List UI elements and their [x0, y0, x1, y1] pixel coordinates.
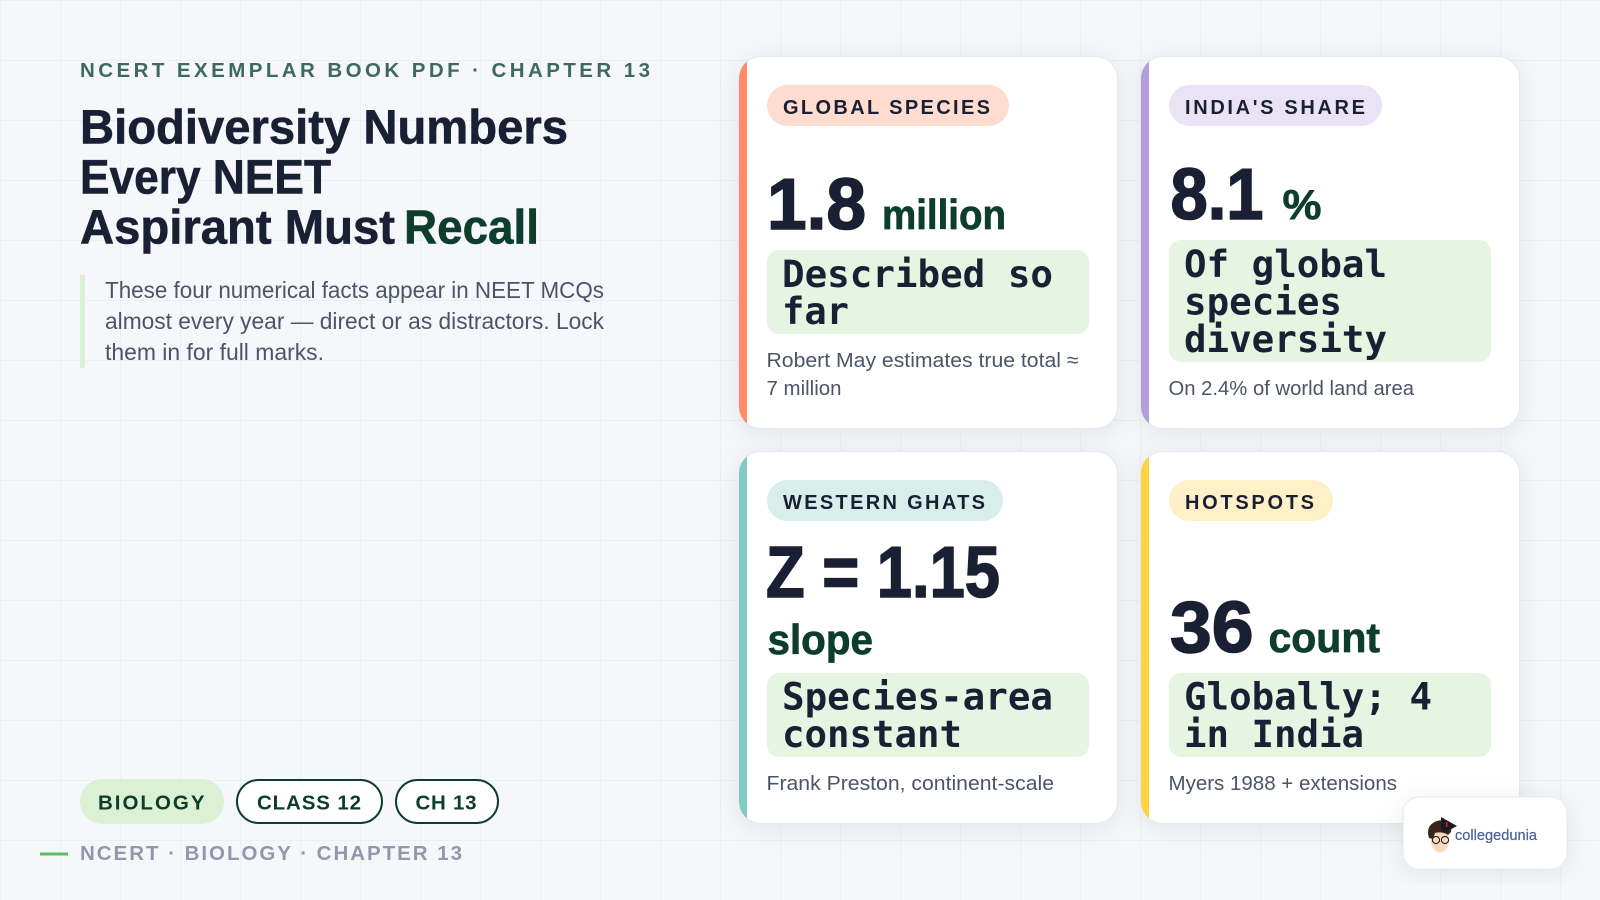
- highlighted description: Of global: [1184, 243, 1387, 286]
- highlighted description: Species-area: [782, 676, 1053, 718]
- pill label: [1169, 85, 1382, 126]
- note: [766, 349, 1078, 400]
- highlighted description: constant: [782, 713, 962, 756]
- pill label: GLOBAL SPECIES: [783, 97, 990, 119]
- tag: chapter 13: [396, 780, 498, 823]
- logo card: collegedunia: [1403, 797, 1567, 869]
- note: Frank Preston, continent-scale: [766, 772, 1054, 795]
- pill label: WESTERN GHATS: [783, 492, 985, 514]
- big number: 36: [1170, 588, 1254, 668]
- pill label: HOTSPOTS: [1185, 492, 1314, 514]
- big number: 8.1: [1170, 155, 1264, 235]
- title: Every NEET: [80, 152, 331, 204]
- big number: slope: [768, 616, 873, 663]
- title: Aspirant Must: [80, 202, 395, 254]
- highlighted description: far: [782, 290, 849, 333]
- eyebrow: chapter label: NCERT EXEMPLAR BOOK PDF · CHAPTER 13: [80, 59, 650, 82]
- pill label: [767, 85, 1009, 126]
- highlighted description: diversity: [1184, 318, 1387, 361]
- subtitle text block with accent bar: These four numerical facts appear in NEET MCQs: [105, 277, 604, 303]
- note: Robert May estimates true total ≈: [766, 349, 1078, 372]
- big number: %: [1282, 181, 1322, 228]
- title: [80, 102, 568, 254]
- highlighted description: Globally; 4: [1184, 676, 1432, 718]
- big number: [1170, 588, 1380, 668]
- title: Recall: [404, 202, 539, 254]
- highlighted description: [767, 673, 1089, 757]
- subtitle text block with accent bar: [80, 275, 604, 368]
- pill label: INDIA'S SHARE: [1185, 97, 1365, 119]
- big number: [767, 165, 1006, 245]
- note: On 2.4% of world land area: [1168, 377, 1415, 400]
- big number: [1170, 155, 1322, 235]
- big number: 1.8: [767, 165, 866, 245]
- tag: class 12: CLASS 12: [257, 792, 361, 814]
- tag: class 12: [237, 780, 382, 823]
- note: Myers 1988 + extensions: [1168, 772, 1397, 795]
- panel: global species: [739, 56, 1118, 428]
- tag: chapter 13: CH 13: [416, 792, 476, 814]
- footer label: NCERT · BIOLOGY · CHAPTER 13: [80, 842, 462, 865]
- icon: student mascot: [1428, 817, 1457, 852]
- logo wordmark: collegedunia: [1455, 828, 1538, 844]
- highlighted description: [1169, 673, 1491, 757]
- tag: biology: [80, 779, 224, 824]
- subtitle text block with accent bar: them in for full marks.: [105, 339, 324, 365]
- highlighted description: Described so: [782, 253, 1053, 296]
- highlighted description: [767, 250, 1089, 334]
- highlighted description: [1169, 240, 1491, 362]
- panel: hotspots: [1141, 452, 1520, 824]
- subtitle text block with accent bar: almost every year — direct or as distractors. Lock: [105, 308, 604, 334]
- big number: Z = 1.15: [766, 533, 1000, 613]
- panel: india's share: [1141, 56, 1520, 428]
- big number: [766, 533, 1000, 663]
- highlighted description: in India: [1184, 713, 1364, 756]
- panel: western ghats: [739, 452, 1118, 824]
- pill label: [1169, 480, 1333, 521]
- big number: million: [882, 191, 1006, 238]
- note: 7 million: [766, 377, 842, 400]
- title: Biodiversity Numbers: [80, 102, 568, 154]
- tag: biology: BIOLOGY: [98, 792, 205, 814]
- big number: count: [1268, 614, 1380, 661]
- highlighted description: species: [1184, 280, 1342, 324]
- pill label: [767, 480, 1003, 521]
